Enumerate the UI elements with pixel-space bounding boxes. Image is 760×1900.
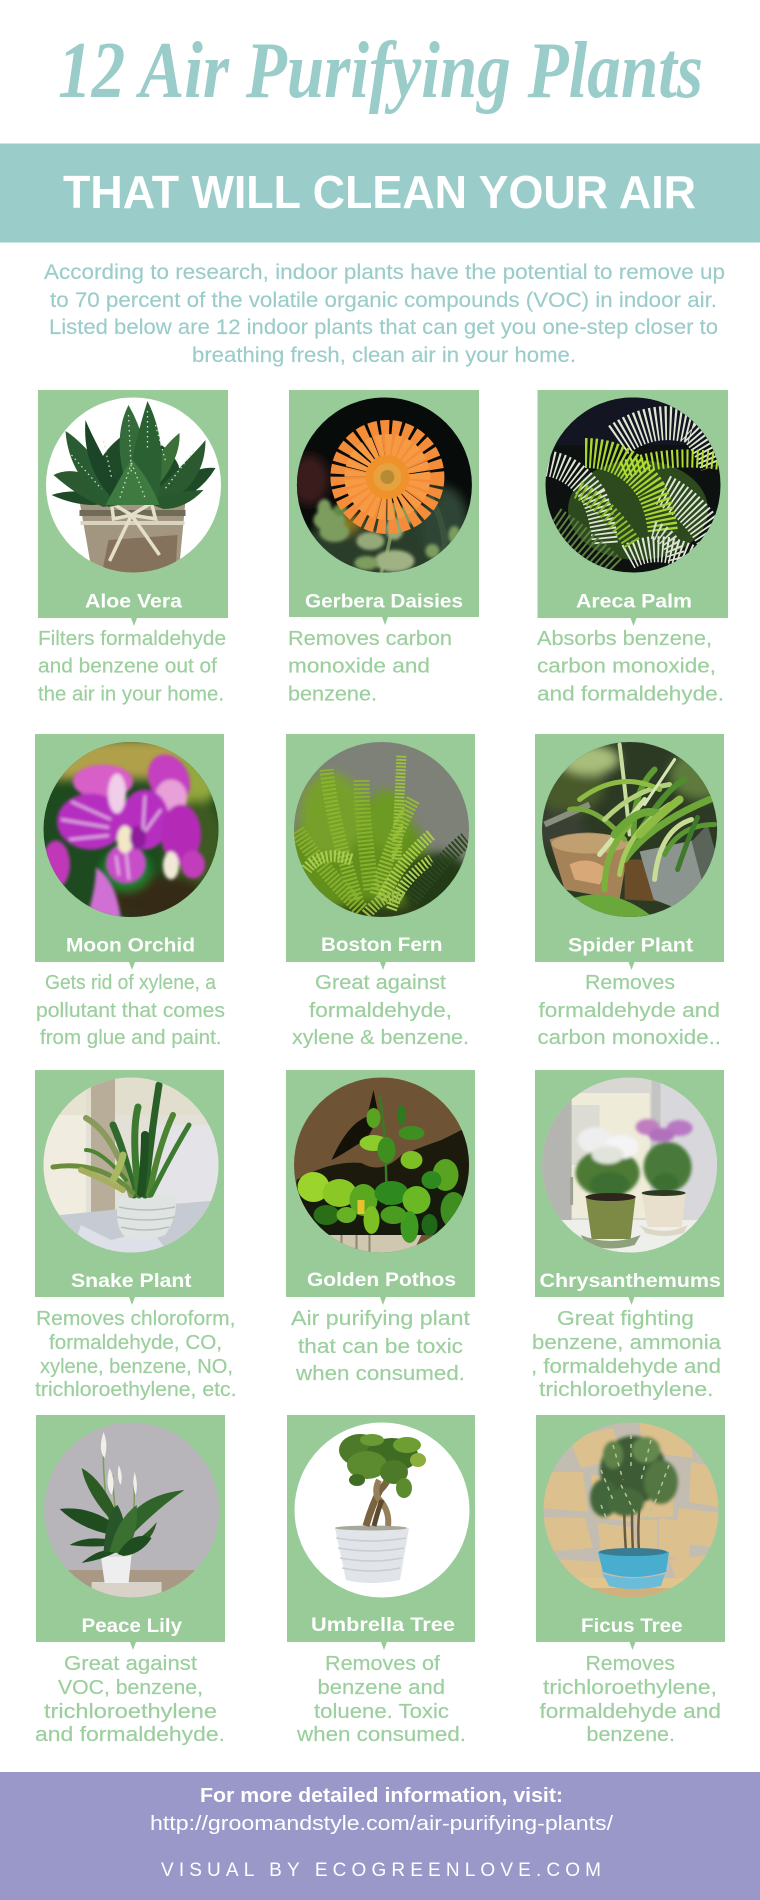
photo: snake plant in white pot — [41, 1075, 221, 1255]
description — [288, 627, 452, 706]
card: Moon Orchid — [35, 734, 226, 1049]
card: Spider Plant — [535, 734, 730, 1049]
description — [296, 1652, 466, 1746]
photo: chrysanthemums in pots — [540, 1075, 720, 1255]
description — [36, 971, 225, 1049]
plant name: Ficus Tree — [581, 1616, 682, 1637]
plant name: Spider Plant — [568, 936, 694, 957]
card panel — [287, 1415, 475, 1650]
description — [292, 971, 469, 1049]
description: and formaldehyde. — [537, 682, 724, 706]
intro text: Listed below are 12 indoor plants that can get you one-step closer to — [49, 316, 718, 339]
card panel — [535, 734, 724, 970]
card panel — [35, 1070, 224, 1305]
description: Removes chloroform, — [36, 1307, 236, 1330]
description — [291, 1307, 470, 1385]
photo: boston fern — [294, 742, 469, 917]
description: Great fighting — [557, 1307, 694, 1330]
card: Ficus Tree — [536, 1415, 725, 1746]
description: carbon monoxide, — [537, 655, 716, 678]
card panel — [36, 1415, 225, 1650]
card panel — [286, 1070, 475, 1305]
photo: ficus tree in blue pot — [541, 1420, 721, 1600]
description: VOC, benzene, — [58, 1676, 203, 1699]
plant name: Chrysanthemums — [540, 1271, 721, 1292]
card panel — [535, 1070, 724, 1305]
description — [531, 1307, 722, 1401]
description: formaldehyde and — [538, 999, 720, 1022]
footer band — [0, 1772, 760, 1900]
card panel — [35, 734, 224, 970]
card panel — [289, 390, 479, 625]
intro text: to 70 percent of the volatile organic compounds (VOC) in indoor air. — [50, 289, 717, 312]
card: Areca Palm — [537, 390, 728, 706]
card: Peace Lily — [35, 1415, 225, 1746]
description: Absorbs benzene, — [537, 627, 712, 650]
description — [35, 1652, 225, 1746]
description: Removes of — [325, 1652, 440, 1675]
description — [537, 627, 724, 706]
plant name: Gerbera Daisies — [305, 592, 463, 613]
description: when consumed. — [296, 1723, 466, 1746]
card panel — [286, 734, 475, 970]
description: Air purifying plant — [291, 1307, 470, 1330]
description: and formaldehyde. — [35, 1723, 225, 1746]
description: benzene, ammonia — [532, 1331, 722, 1354]
card panel — [38, 390, 228, 626]
description: Great against — [315, 971, 446, 994]
photo: golden pothos — [292, 1075, 472, 1255]
photo: peace lily — [42, 1420, 222, 1600]
footer credit: VISUAL BY ECOGREENLOVE.COM — [161, 1860, 601, 1881]
subtitle text: THAT WILL CLEAN YOUR AIR — [63, 166, 696, 218]
description: Removes — [586, 1652, 675, 1675]
photo: spider plant in pots — [542, 742, 718, 917]
description: xylene & benzene. — [292, 1026, 469, 1049]
description: the air in your home. — [38, 682, 224, 706]
plant name: Areca Palm — [576, 592, 692, 613]
description: formaldehyde, CO, — [49, 1331, 222, 1354]
description: benzene and — [318, 1676, 445, 1699]
description: trichloroethylene, — [543, 1676, 717, 1699]
plant name: Aloe Vera — [85, 592, 182, 613]
description: formaldehyde, — [309, 999, 452, 1022]
description: Filters formaldehyde — [38, 627, 226, 650]
intro text — [44, 261, 725, 367]
plant name: Golden Pothos — [307, 1270, 456, 1291]
card: Boston Fern — [286, 734, 475, 1049]
plant name: Moon Orchid — [66, 936, 195, 957]
card: Snake Plant — [35, 1070, 236, 1401]
description: trichloroethylene — [44, 1700, 217, 1723]
description: when consumed. — [295, 1362, 465, 1385]
plant name: Snake Plant — [71, 1271, 192, 1292]
description: Removes — [585, 971, 675, 994]
description — [540, 1652, 721, 1746]
description: benzene. — [586, 1723, 675, 1746]
intro text: According to research, indoor plants have the potential to remove up — [44, 261, 725, 284]
card: Gerbera Daisies — [288, 390, 479, 706]
photo: orange gerbera daisy — [296, 398, 472, 572]
footer url: http://groomandstyle.com/air-purifying-plants/ — [150, 1812, 613, 1835]
card: Umbrella Tree — [287, 1415, 475, 1746]
intro text: breathing fresh, clean air in your home. — [192, 344, 576, 367]
description: carbon monoxide.. — [538, 1026, 721, 1049]
photo: aloe vera in pot — [44, 395, 224, 575]
card: Chrysanthemums — [531, 1070, 724, 1401]
subtitle band — [0, 144, 760, 242]
photo: umbrella tree in white pot — [292, 1420, 472, 1600]
description — [35, 1307, 236, 1401]
description: from glue and paint. — [40, 1026, 222, 1049]
photo: areca palm fronds — [543, 395, 723, 575]
description: Great against — [64, 1652, 197, 1675]
description: toluene. Toxic — [314, 1700, 449, 1723]
description: and benzene out of — [38, 655, 217, 678]
description: monoxide and — [288, 655, 430, 678]
description: Gets rid of xylene, a — [45, 971, 217, 994]
description — [38, 627, 226, 706]
plant name: Peace Lily — [82, 1616, 182, 1637]
card: Golden Pothos — [286, 1070, 475, 1385]
footer call to action: For more detailed information, visit: — [200, 1785, 563, 1807]
photo: purple moon orchid — [44, 742, 218, 917]
description: benzene. — [288, 682, 377, 706]
description: Removes carbon — [288, 627, 452, 650]
description: pollutant that comes — [36, 999, 225, 1022]
description: formaldehyde and — [540, 1700, 721, 1723]
description: trichloroethylene. — [539, 1378, 714, 1401]
description: , formaldehyde and — [531, 1355, 721, 1378]
description: xylene, benzene, NO, — [40, 1355, 233, 1378]
description: that can be toxic — [298, 1335, 463, 1358]
card panel — [538, 390, 728, 626]
plant name: Boston Fern — [321, 935, 442, 956]
description — [538, 971, 721, 1049]
plant name: Umbrella Tree — [311, 1615, 455, 1636]
card panel — [536, 1415, 725, 1650]
card: Aloe Vera — [38, 390, 228, 706]
description: trichloroethylene, etc. — [35, 1378, 236, 1401]
